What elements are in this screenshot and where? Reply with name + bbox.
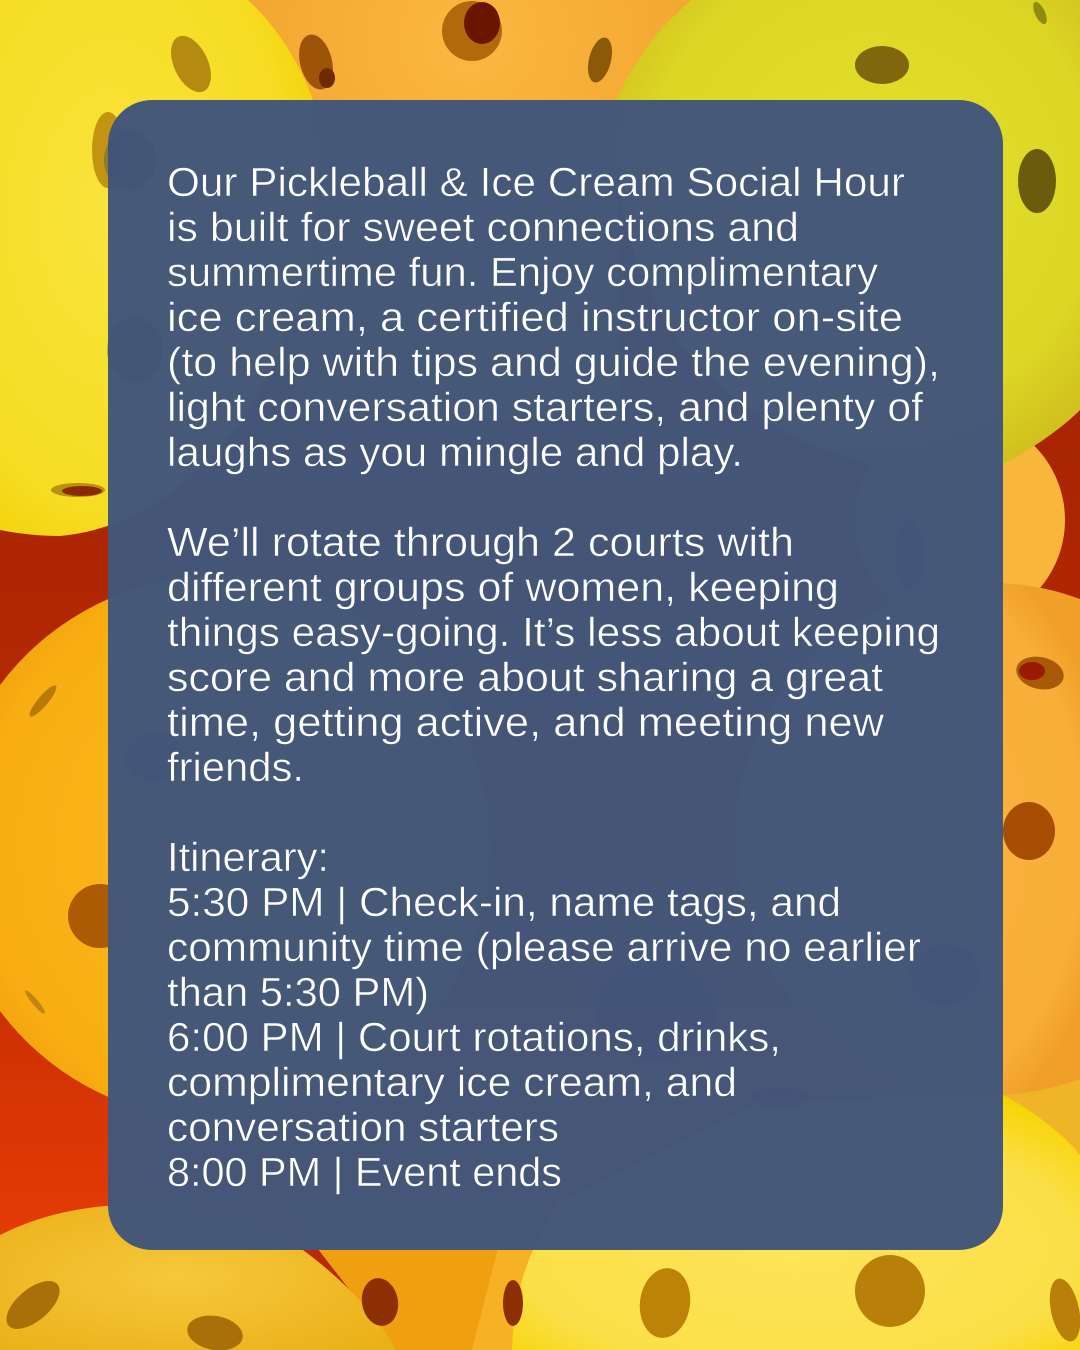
- text block: intro paragraph: summertime fun. Enjoy complimentary: [167, 249, 878, 295]
- text block: itinerary: Itinerary:: [167, 834, 329, 880]
- text block: itinerary: [167, 834, 921, 1195]
- text block: itinerary: 6:00 PM | Court rotations, drinks,: [167, 1014, 781, 1060]
- text block: courts paragraph: We’ll rotate through 2 courts with: [167, 519, 794, 565]
- text block: itinerary: conversation starters: [167, 1104, 559, 1150]
- ball: top left yellow: [0, 0, 318, 536]
- text block: courts paragraph: time, getting active, and meeting new: [167, 699, 884, 745]
- text block: courts paragraph: [167, 519, 940, 790]
- text block: itinerary: community time (please arrive no earlier: [167, 924, 921, 970]
- text block: intro paragraph: Our Pickleball & Ice Cream Social Hour: [167, 159, 905, 205]
- ball: bottom right yellow: [512, 1095, 1080, 1350]
- ball: right orange: [735, 583, 1080, 1095]
- panel: event description: [108, 100, 1003, 1250]
- text block: itinerary: 8:00 PM | Event ends: [167, 1149, 562, 1195]
- ball: top center orange: [240, 0, 700, 420]
- text block: intro paragraph: ice cream, a certified instructor on-site: [167, 294, 903, 340]
- text block: itinerary: complimentary ice cream, and: [167, 1059, 737, 1105]
- text block: intro paragraph: light conversation starters, and plenty of: [167, 384, 924, 430]
- text block: itinerary: than 5:30 PM): [167, 969, 429, 1015]
- text block: intro paragraph: is built for sweet connections and: [167, 204, 799, 250]
- ball: top right yellow-green: [615, 0, 1080, 472]
- text block: itinerary: 5:30 PM | Check-in, name tags, and: [167, 879, 841, 925]
- text block: intro paragraph: (to help with tips and guide the evening),: [167, 339, 940, 385]
- ball: right upper orange: [855, 415, 1065, 625]
- ball: left orange: [0, 576, 490, 1120]
- text block: intro paragraph: [167, 159, 940, 475]
- ball: bottom center orange: [280, 1200, 540, 1350]
- text block: courts paragraph: score and more about sharing a great: [167, 654, 884, 700]
- text block: courts paragraph: different groups of women, keeping: [167, 564, 839, 610]
- ball: right lower back piece: [1003, 1040, 1080, 1160]
- ball: bottom left yellow: [0, 1205, 396, 1350]
- text block: courts paragraph: things easy-going. It’s less about keeping: [167, 609, 940, 655]
- text block: intro paragraph: laughs as you mingle and play.: [167, 429, 743, 475]
- text block: courts paragraph: friends.: [167, 744, 304, 790]
- ball: bottom center back piece: [472, 1240, 540, 1350]
